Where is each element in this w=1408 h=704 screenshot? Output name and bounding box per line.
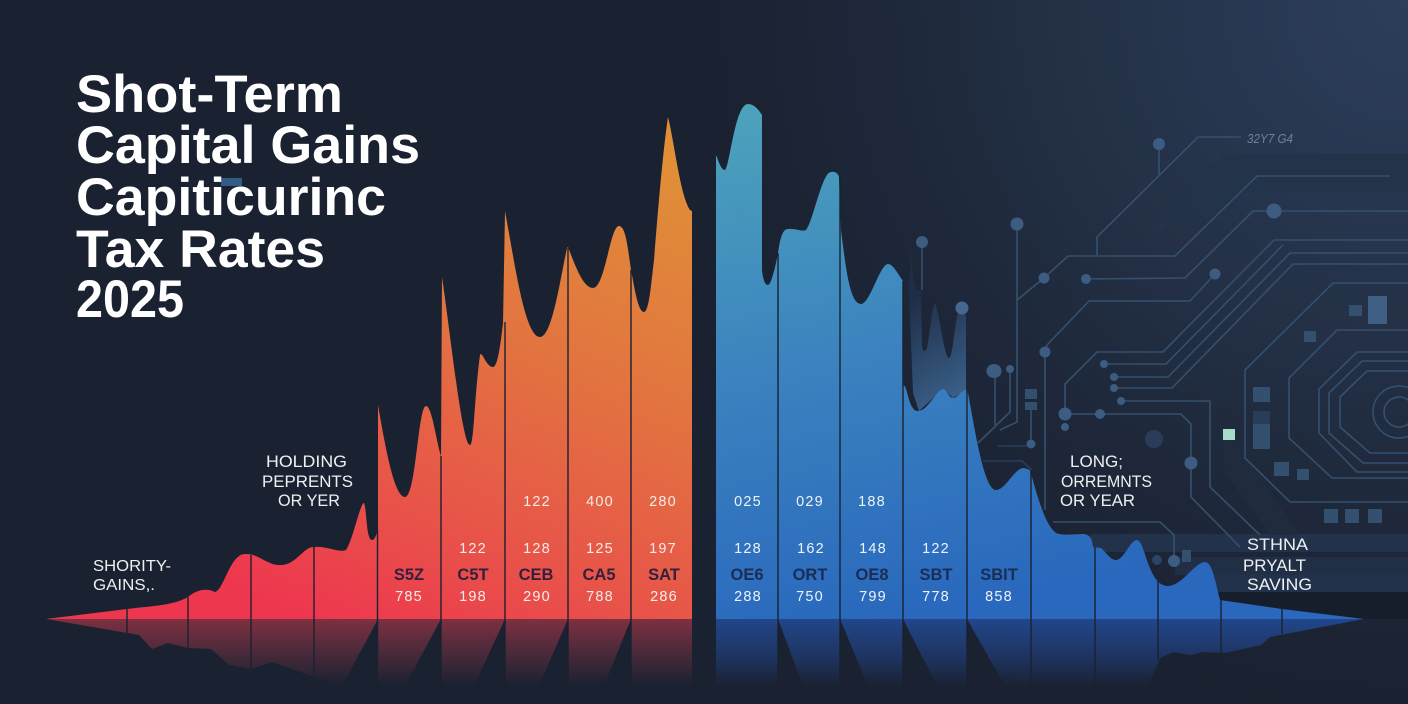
values on blue bars: ORT [793,566,827,584]
values on red and orange bars: 785 [395,589,423,605]
values on red and orange bars: 125 [586,541,614,557]
label: long-term: ORREMNTS [1061,473,1152,491]
values on blue bars: 148 [859,541,887,557]
small circuit label: 32Y7 G4 [1247,132,1293,146]
bar dividers [127,178,1282,686]
values on red and orange bars: SAT [648,566,680,584]
values on red and orange bars [394,494,680,605]
long-term area chart: blue [716,104,1364,619]
values on red and orange bars: CA5 [582,566,616,584]
values on red and orange bars: 400 [586,494,614,510]
values on red and orange bars: 122 [459,541,487,557]
label: holding periods: PEPRENTS [262,473,353,491]
label: short-term gains: GAINS,. [93,577,155,594]
label: long-term [1060,453,1152,510]
title [76,65,420,329]
values on blue bars: 858 [985,589,1013,605]
values on red and orange bars: C5T [457,566,489,584]
title: 2025 [76,270,184,329]
values on blue bars: OE6 [730,566,764,584]
values on blue bars: 122 [922,541,950,557]
title: Tax Rates [76,220,325,279]
short-term area chart: red to orange [46,117,692,619]
circuit board decoration [916,137,1408,619]
values on red and orange bars: 122 [523,494,551,510]
title: Shot-Term [76,65,343,124]
long-term area chart: dark spike layer [909,249,966,411]
title: Capiticurinc [76,168,386,227]
circuit dot over blue peak [956,302,968,314]
title: Capital Gains [76,116,420,175]
label: savings [1243,536,1312,594]
values on red and orange bars: 280 [649,494,677,510]
label: savings: SAVING [1247,576,1312,594]
label: holding periods: OR YER [278,492,340,510]
values on blue bars: 188 [858,494,886,510]
label: long-term: OR YEAR [1060,492,1135,510]
label: holding periods: HOLDING [266,453,347,471]
values on blue bars: 128 [734,541,762,557]
values on red and orange bars: S5Z [394,566,424,584]
values on blue bars: 799 [859,589,887,605]
values on blue bars: OE8 [855,566,889,584]
label: short-term gains: SHORITY- [93,558,171,575]
label: short-term gains [93,558,171,594]
values on red and orange bars: CEB [519,566,553,584]
values on blue bars: SBT [920,566,952,584]
values on red and orange bars: 788 [586,589,614,605]
values on blue bars: 162 [797,541,825,557]
reflection: blue side [716,619,1364,686]
reflection: red side [46,619,692,686]
label: long-term: LONG; [1070,453,1123,471]
title smudge [221,178,242,186]
label: savings: STHNA [1247,536,1308,554]
values on blue bars: 750 [796,589,824,605]
label: savings: PRYALT [1243,557,1306,575]
values on red and orange bars: 198 [459,589,487,605]
values on blue bars: 029 [796,494,824,510]
values on blue bars: 778 [922,589,950,605]
values on blue bars: SBIT [980,566,1018,584]
values on red and orange bars: 128 [523,541,551,557]
values on blue bars [730,494,1018,605]
label: holding periods [262,453,353,510]
values on blue bars: 288 [734,589,762,605]
values on blue bars: 025 [734,494,762,510]
values on red and orange bars: 290 [523,589,551,605]
values on red and orange bars: 197 [649,541,677,557]
accent square: mint chip [1223,429,1235,440]
values on red and orange bars: 286 [650,589,678,605]
